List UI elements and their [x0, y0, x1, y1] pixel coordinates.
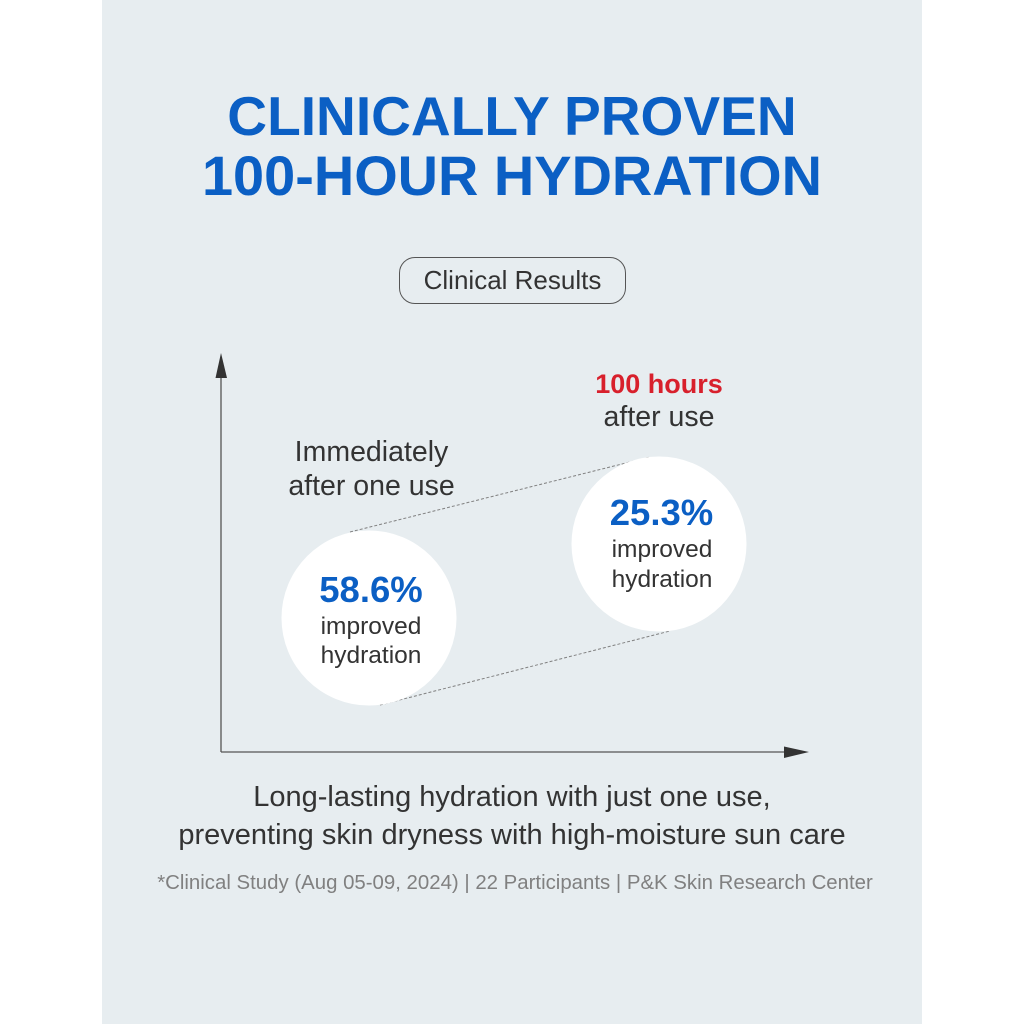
- circle: immediately: [282, 530, 456, 706]
- dotted connector bottom: [380, 631, 670, 705]
- badge: clinical results: Clinical Results: [424, 265, 601, 295]
- y axis arrow: [216, 353, 227, 752]
- x axis arrow: [221, 746, 809, 758]
- stat: 58.6%: 58.6%: [319, 569, 423, 610]
- caption: improved hydration right: hydration: [612, 566, 712, 593]
- label: immediately after one use: [288, 436, 455, 502]
- title: [202, 85, 822, 207]
- label: immediately after one use: after one use: [288, 470, 455, 502]
- title: CLINICALLY PROVEN: [227, 85, 797, 147]
- footnote: *Clinical Study (Aug 05-09, 2024) | 22 Participants | P&K Skin Research Center: [157, 872, 873, 894]
- summary text: Long-lasting hydration with just one use,: [253, 781, 771, 813]
- label: 100 hours after use: [595, 369, 723, 433]
- title: 100-HOUR HYDRATION: [202, 144, 822, 207]
- caption: improved hydration right: [612, 536, 712, 593]
- stat: 25.3%: 25.3%: [610, 492, 713, 533]
- summary text: [178, 781, 846, 851]
- summary text: preventing skin dryness with high-moisture sun care: [178, 819, 846, 851]
- label: immediately after one use: Immediately: [295, 436, 448, 468]
- circle: 100 hours: [572, 456, 746, 632]
- caption: improved hydration left: [321, 613, 421, 669]
- dotted connector top: [350, 457, 650, 532]
- caption: improved hydration left: improved: [321, 613, 421, 640]
- label: 100 hours after use: 100 hours: [595, 369, 723, 399]
- badge: clinical results: [399, 257, 626, 304]
- caption: improved hydration right: improved: [612, 536, 712, 563]
- caption: improved hydration left: hydration: [321, 642, 421, 669]
- label: 100 hours after use: after use: [604, 401, 714, 433]
